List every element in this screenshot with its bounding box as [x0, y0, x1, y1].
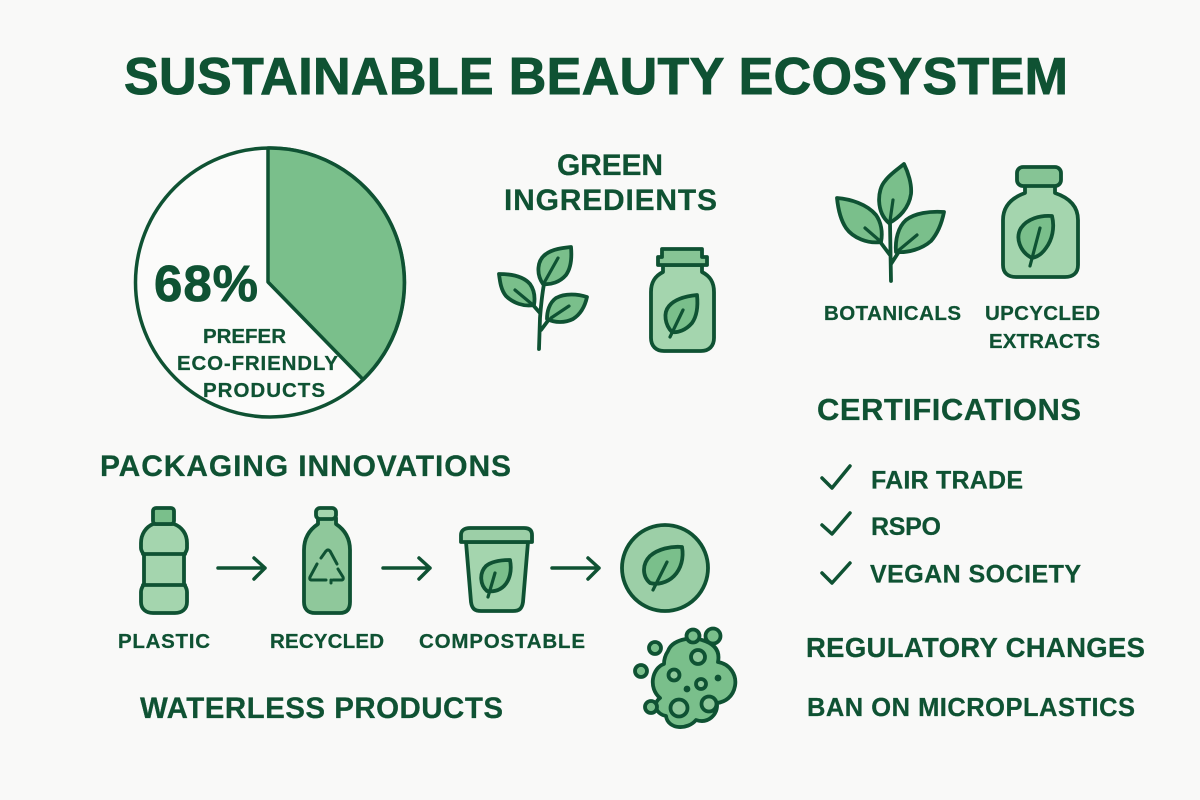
- label: RSPO: RSPO: [871, 513, 941, 541]
- arrow: compostable to compost: [552, 558, 599, 579]
- pie value: 68%: [154, 255, 258, 312]
- title: SUSTAINABLE BEAUTY ECOSYSTEM: [124, 48, 1068, 106]
- pie circle: [136, 148, 404, 417]
- icon: compostable cup: [461, 528, 532, 611]
- icon: recycled bottle: [304, 508, 350, 613]
- packaging heading: PACKAGING INNOVATIONS: [100, 450, 511, 483]
- panel: green ingredients: [499, 149, 717, 351]
- icon: check RSPO: [822, 513, 850, 534]
- label: upcycled extracts: EXTRACTS: [989, 330, 1100, 353]
- pie caption: PREFER: [203, 325, 286, 348]
- panel: waterless products: [140, 628, 735, 727]
- label: compostable: COMPOSTABLE: [419, 630, 585, 653]
- label: upcycled extracts: [985, 302, 1100, 353]
- label: botanicals: BOTANICALS: [824, 302, 961, 325]
- waterless heading: WATERLESS PRODUCTS: [140, 692, 503, 725]
- icon: check fair trade: [822, 466, 850, 488]
- icon: waterless foam cluster: [635, 628, 735, 727]
- icon: plastic bottle: [141, 508, 187, 613]
- panel: packaging innovations: [100, 450, 708, 653]
- label: recycled: RECYCLED: [270, 630, 384, 653]
- label: upcycled extracts: UPCYCLED: [985, 302, 1100, 325]
- icon: check vegan society: [822, 563, 850, 583]
- regulatory heading: REGULATORY CHANGES: [806, 632, 1145, 663]
- pie highlighted wedge: [268, 148, 404, 380]
- green ingredients heading: GREEN: [557, 149, 663, 182]
- label: vegan society: VEGAN SOCIETY: [870, 560, 1081, 588]
- green ingredients heading: INGREDIENTS: [504, 184, 717, 217]
- green ingredients heading: [504, 149, 717, 217]
- pie caption: ECO-FRIENDLY: [177, 352, 338, 375]
- icon: small plant: [499, 247, 587, 349]
- arrow: recycled to compostable: [383, 558, 430, 579]
- label: plastic: PLASTIC: [118, 630, 210, 653]
- icon: large jar with leaf: [1003, 167, 1078, 277]
- arrow: plastic to recycled: [218, 558, 265, 579]
- regulatory item: BAN ON MICROPLASTICS: [807, 694, 1135, 722]
- panel: certifications: [817, 392, 1081, 588]
- pie caption: [177, 325, 338, 402]
- icon: large plant: [837, 164, 944, 281]
- pie caption: PRODUCTS: [203, 379, 325, 402]
- panel: pie chart 68%: [136, 148, 404, 417]
- icon: compost circle with leaf: [622, 525, 708, 611]
- label: fair trade: FAIR TRADE: [871, 466, 1023, 494]
- panel: regulatory changes: [806, 632, 1145, 722]
- certifications heading: CERTIFICATIONS: [817, 392, 1081, 427]
- icon: small jar with leaf: [651, 249, 714, 351]
- panel: botanicals and upcycled extracts: [824, 164, 1100, 353]
